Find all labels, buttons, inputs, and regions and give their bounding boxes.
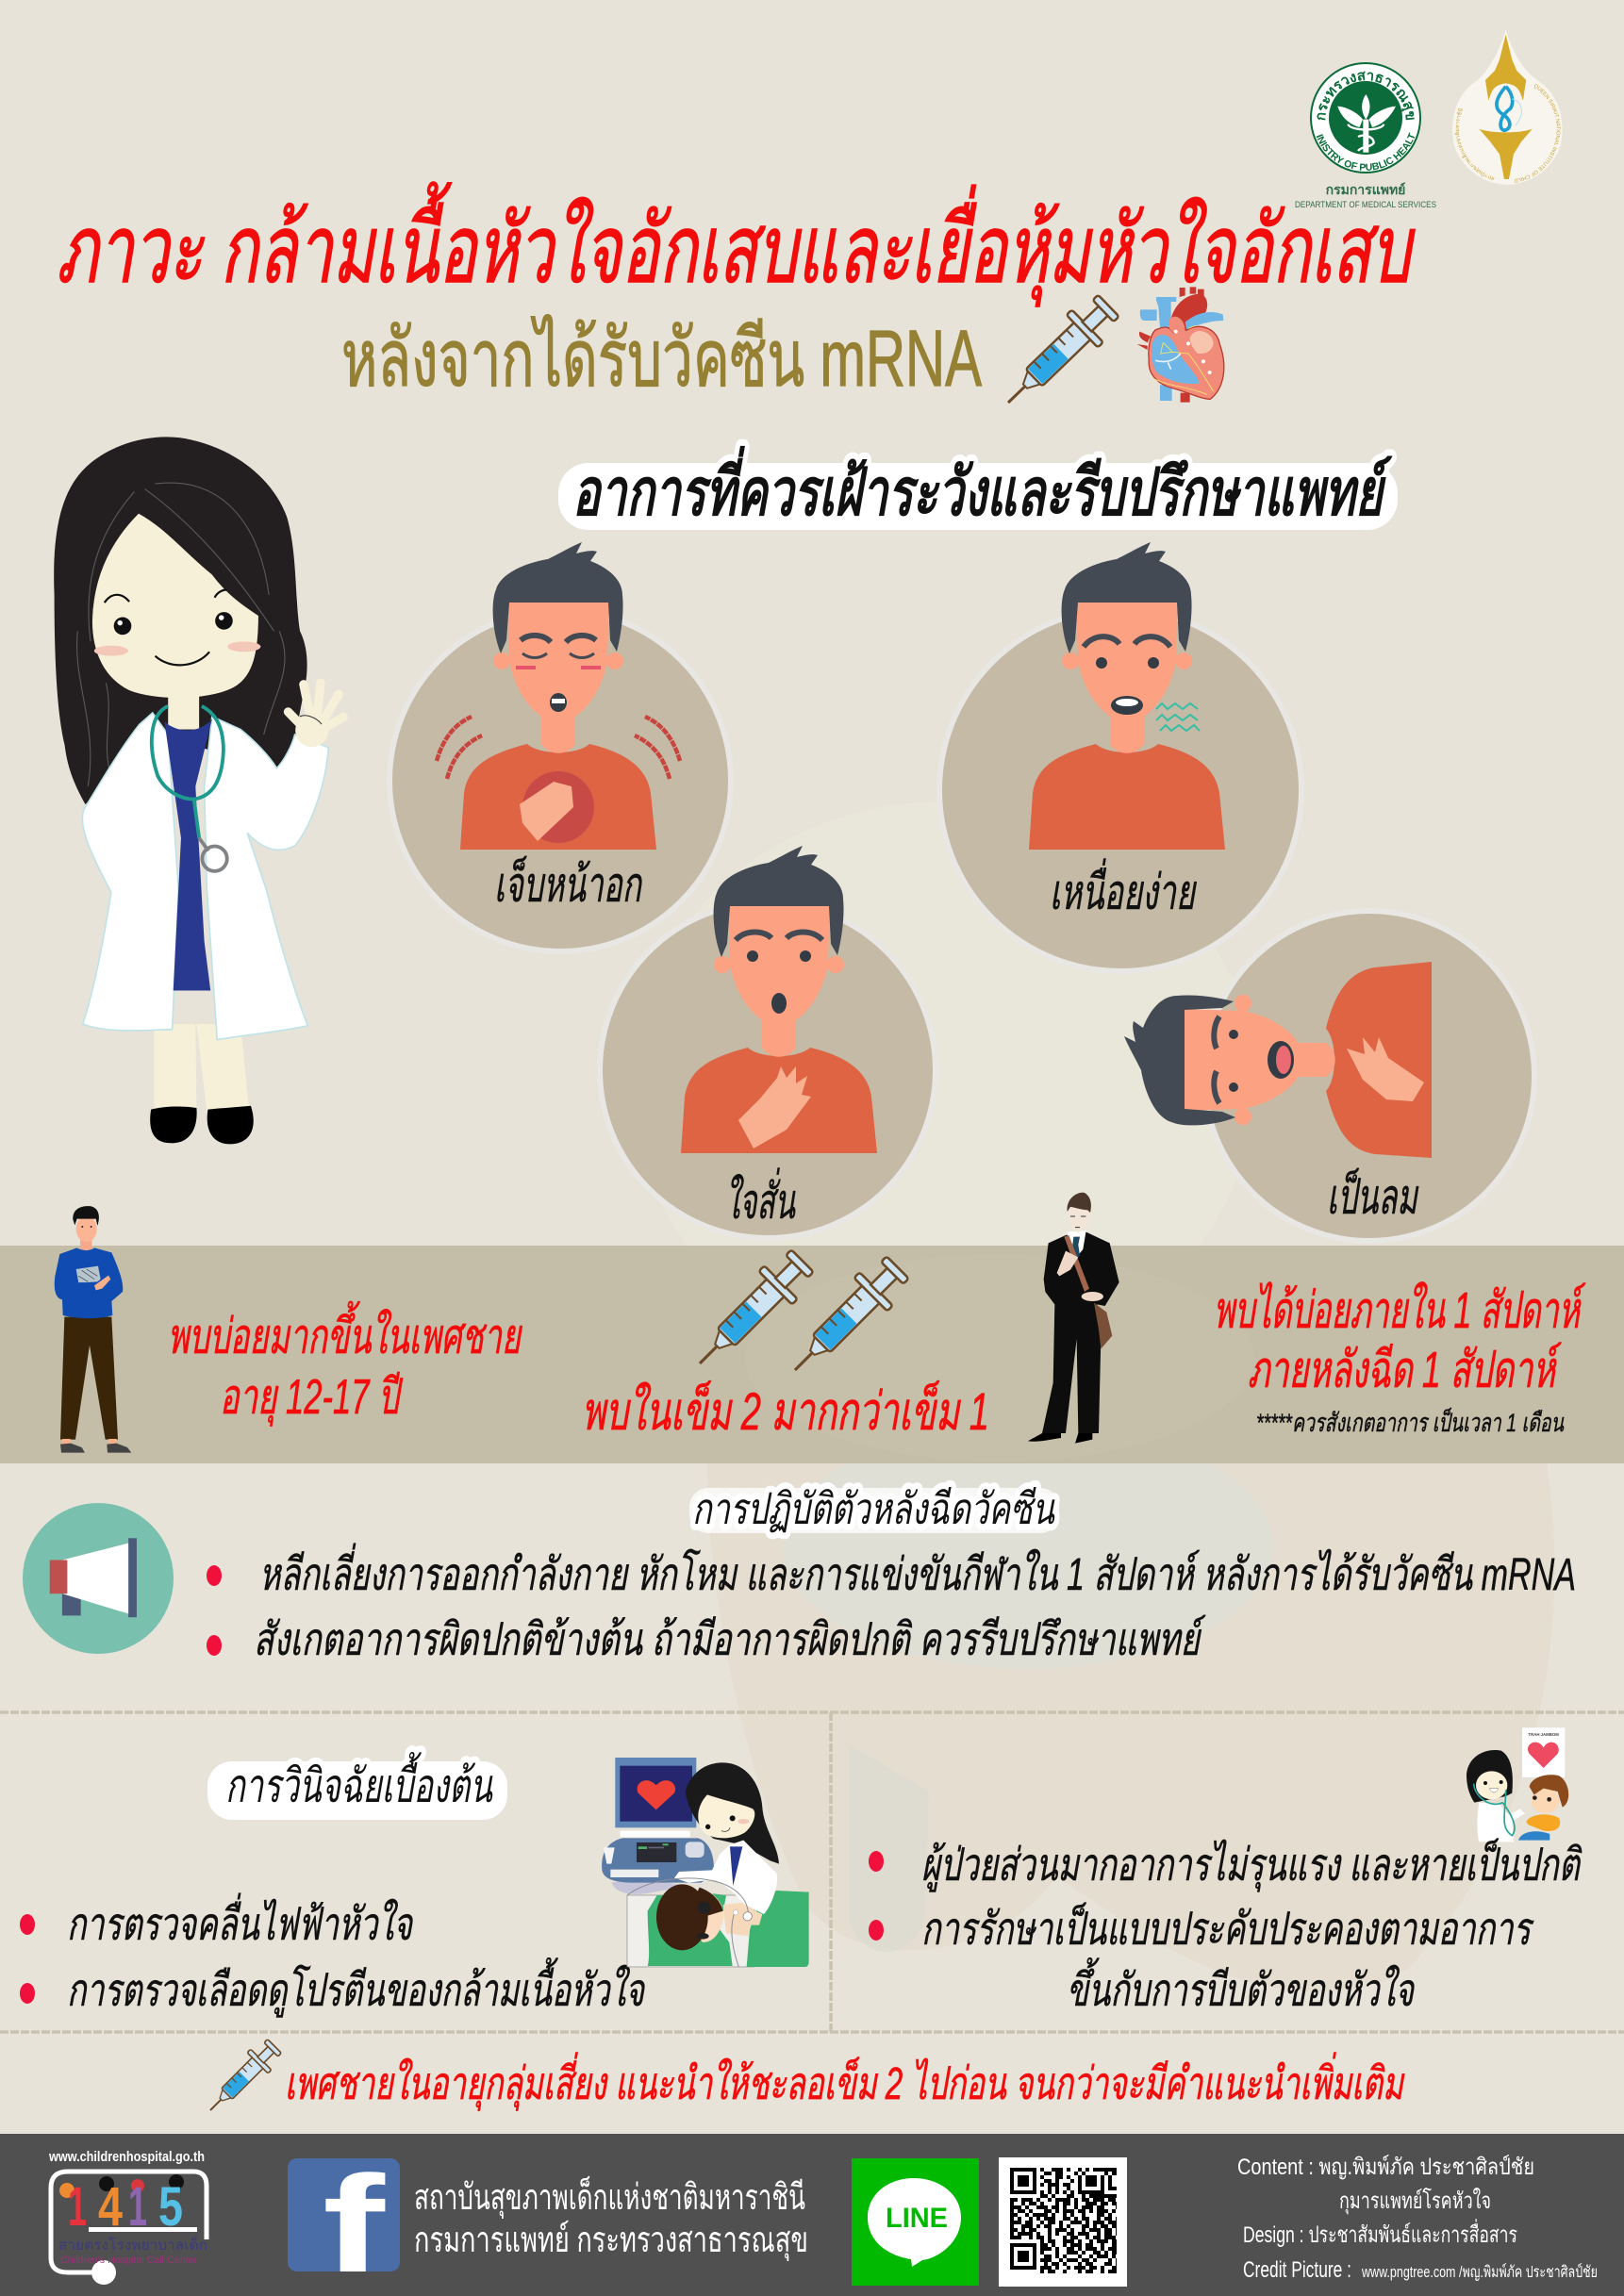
credits: [1237, 2154, 1598, 2283]
list: diagnosis: การตรวจคลื่นไฟฟ้าหัวใจ: [67, 1892, 413, 1950]
statistics band: [0, 1246, 1624, 1463]
doctor illustration: [54, 437, 343, 1144]
footer organisation text: [414, 2175, 808, 2261]
list: diagnosis: การตรวจเลือดดูโปรตีนของกล้ามเนื้อหัวใจ: [67, 1957, 645, 2018]
illustration: doctor with child: [1467, 1727, 1568, 1842]
stat: within 1 week: [1214, 1281, 1586, 1437]
logo: 1415 hotline: 5: [158, 2176, 183, 2238]
credits: Credit Picture :: [1243, 2257, 1351, 2283]
logo: queen sirikit institute: QUEEN SIRIKIT NATIONAL INSTITUTE OF CHILD HEALTH: [1515, 84, 1560, 183]
logo: 1415 hotline: Children's Hospital Call Center: [60, 2255, 198, 2266]
credits: กุมารแพทย์โรคหัวใจ: [1339, 2188, 1491, 2215]
list: after vaccination advice: สังเกตอาการผิดปกติข้างต้น ถ้ามีอาการผิดปกติ ควรรีบปรึกษาแพทย์: [254, 1614, 1206, 1665]
qr code: [999, 2157, 1127, 2287]
logo: 1415 hotline: สายตรงโรงพยาบาลเด็ก: [58, 2236, 207, 2254]
logo: queen sirikit institute: [1452, 30, 1562, 185]
heading: initial diagnosis: [207, 1752, 507, 1820]
symptom: fainting: [1124, 911, 1534, 1241]
stat: male age 12-17: [168, 1300, 522, 1427]
heading: initial diagnosis: การวินิจฉัยเบื้องต้น: [225, 1752, 493, 1812]
logo: ministry of public health: DEPARTMENT OF MEDICAL SERVICES: [1295, 200, 1436, 209]
footer bar: [0, 2134, 1624, 2296]
dividers: [0, 1712, 1624, 2032]
icon: businessman: [1028, 1193, 1119, 1444]
logo: 1415 hotline: www.childrenhospital.go.th: [48, 2149, 205, 2165]
icons: two syringes: [683, 1245, 914, 1387]
logo: 1415 hotline: 1: [128, 2176, 147, 2238]
logo: 1415 hotline: 1: [68, 2176, 87, 2238]
illustration: ultrasound exam: [602, 1758, 809, 1967]
list: prognosis and treatment: ขึ้นกับการบีบตัวของหัวใจ: [1067, 1957, 1415, 2016]
subtitle: หลังจากได้รับวัคซีน mRNA: [341, 314, 982, 403]
heading: symptoms: [558, 445, 1398, 530]
logo: 1415 hotline: [48, 2149, 207, 2285]
icon: syringe: [992, 289, 1124, 419]
heading: after vaccination: การปฏิบัติตัวหลังฉีดวัคซีน: [692, 1484, 1055, 1533]
icon: heart anatomy: [1137, 287, 1224, 403]
logo: ministry of public health: [1295, 62, 1436, 209]
symptom: chest pain: เจ็บหน้าอก: [494, 855, 643, 913]
list: diagnosis: [20, 1892, 645, 2018]
logo: line: LINE: [886, 2203, 948, 2234]
recommendation: [200, 2036, 1405, 2121]
stat: male age 12-17: พบบ่อยมากขึ้นในเพศชาย: [168, 1300, 522, 1364]
list: prognosis and treatment: [869, 1838, 1583, 2016]
footer organisation text: กรมการแพทย์ กระทรวงสาธารณสุข: [414, 2220, 808, 2261]
stat: second dose: พบในเข็ม 2 มากกว่าเข็ม 1: [582, 1380, 989, 1441]
logo: ministry of public health: กระทรวงสาธารณสุข: [1317, 72, 1415, 121]
symptom: fatigue: เหนื่อยง่าย: [1050, 858, 1197, 920]
logo: line: [852, 2158, 979, 2286]
icon: young man: [55, 1206, 131, 1453]
symptom: chest pain: [389, 542, 731, 951]
list: after vaccination advice: [207, 1543, 1576, 1665]
illustration: doctor with child: TRAH JAMBOM: [1528, 1732, 1559, 1737]
icon: megaphone: [23, 1503, 174, 1654]
credits: Design : ประชาสัมพันธ์และการสื่อสาร: [1243, 2219, 1517, 2248]
credits: Content : พญ.พิมพ์ภัค ประชาศิลป์ชัย: [1237, 2154, 1534, 2180]
logo: facebook: [288, 2147, 400, 2296]
footer organisation text: สถาบันสุขภาพเด็กแห่งชาติมหาราชินี: [414, 2175, 805, 2219]
logo: ministry of public health: กรมการแพทย์: [1326, 182, 1405, 197]
symptom: fatigue: [939, 542, 1301, 971]
symptom: palpitations: ใจสั่น: [725, 1167, 796, 1230]
logo: 1415 hotline: 4: [98, 2176, 123, 2238]
stat: male age 12-17: อายุ 12-17 ปี: [220, 1370, 404, 1427]
logo: queen sirikit institute: สถาบันสุขภาพเด็กแห่งชาติมหาราชินี: [1454, 107, 1494, 180]
faint heart watermark: [632, 801, 1554, 1991]
symptom: fainting: เป็นลม: [1327, 1167, 1419, 1225]
symptom: palpitations: [600, 846, 936, 1238]
